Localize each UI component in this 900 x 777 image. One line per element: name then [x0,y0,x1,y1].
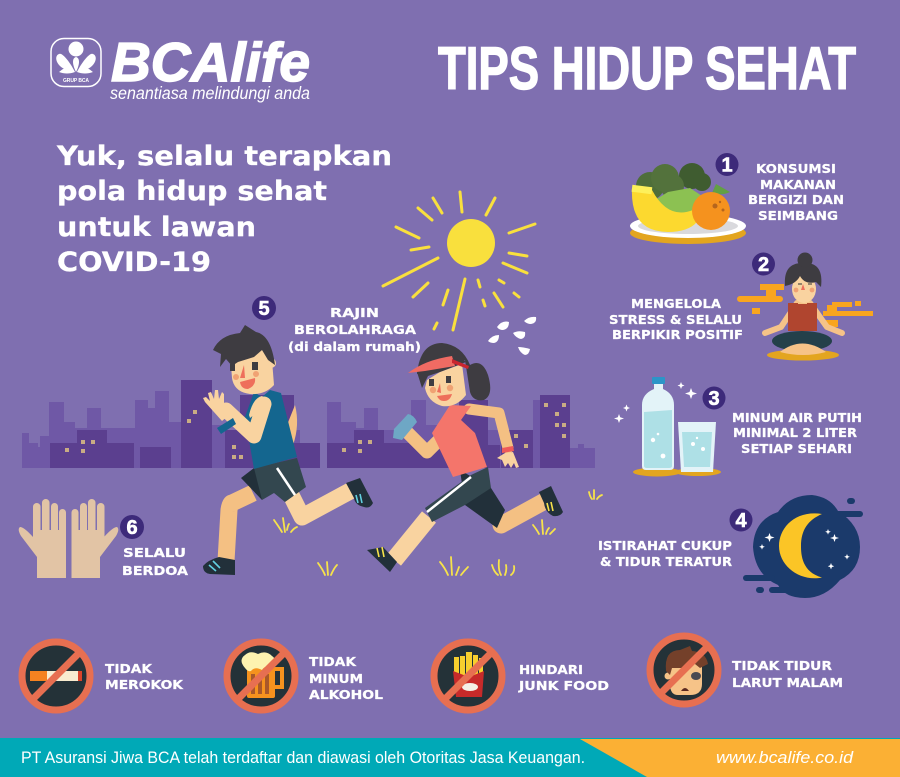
icon: moon and stars [743,495,863,598]
label [598,538,732,569]
label: MAKANAN [760,177,836,192]
city skyline [22,380,595,468]
tip 2: stress [609,252,873,360]
label: KONSUMSI [756,161,836,176]
icon: bottle and glass [633,377,721,476]
badge 3: 3 [708,388,720,410]
icon: meditating woman [737,252,873,360]
badge 2 [752,252,775,276]
label: ISTIRAHAT CUKUP [598,538,732,553]
tip 4: sleep [598,495,863,598]
badge 1 [716,153,738,176]
icon: tired face crossed out [650,636,718,704]
grass tufts [274,490,602,575]
label: MEROKOK [105,677,184,692]
label: rajin berolahraga: BEROLAHRAGA [294,322,416,337]
label: rajin berolahraga: (di dalam rumah) [288,339,421,354]
label: SEIMBANG [758,208,838,223]
label: BERGIZI DAN [748,192,844,207]
tip 1: food [630,153,844,244]
label: ALKOHOL [309,687,383,702]
icon: plate of food [630,163,746,244]
label: & TIDUR TERATUR [600,554,732,569]
label: rajin berolahraga [288,305,421,354]
heading text block: untuk lawan [57,212,256,243]
label: MINUM [309,671,363,686]
label [732,658,843,690]
website: www.bcalife.co.id [716,748,854,767]
wordmark: BCAlife [111,31,310,93]
badge 2: 2 [758,254,769,276]
label [518,662,609,693]
badge 1: 1 [721,154,733,176]
logo: BCA life [51,31,310,103]
badge 4 [730,508,752,532]
icon: BCA emblem: GRUP BCA [63,78,89,84]
label [748,161,844,223]
label: TIDAK [309,654,357,669]
tip 3: water [614,377,862,476]
label: MINUM AIR PUTIH [732,410,862,425]
prohibition: no alcohol [227,642,383,710]
footer bar [0,738,900,777]
label: selalu berdoa: SELALU [123,545,186,560]
prohibition: no staying up late [650,636,843,704]
badge 6: 6 [126,517,138,539]
label: selalu berdoa: BERDOA [122,563,188,578]
badge 4: 4 [735,510,747,532]
label: JUNK FOOD [518,678,609,693]
icon: sparkles [614,382,697,423]
tagline: senantiasa melindungi anda [110,83,310,103]
label: selalu berdoa [122,545,188,578]
disclaimer text: PT Asuransi Jiwa BCA telah terdaftar dan diawasi oleh Otoritas Jasa Keuangan. [21,748,585,767]
character: woman running [367,343,563,572]
icon: praying hands [19,499,118,578]
label: MENGELOLA [631,296,721,311]
prohibition: no smoking [22,642,184,710]
prohibition: no junk food [434,642,609,710]
character: man running [203,325,373,575]
icon: BCA emblem [51,38,101,86]
icon: sweat drops [488,317,536,355]
label [309,654,383,702]
badge 5: 5 [258,298,270,320]
icon: fries crossed out [434,642,502,710]
label: HINDARI [519,662,583,677]
icon: beer crossed out [227,642,295,710]
badge 5 [252,296,276,320]
label [609,296,743,342]
heading text block [56,141,392,278]
badge 6 [120,515,144,539]
label: TIDAK [105,661,153,676]
icon: sun with rays [383,192,535,330]
label: TIDAK TIDUR [732,658,832,673]
label: LARUT MALAM [732,675,843,690]
label: STRESS & SELALU [609,312,742,327]
label: SETIAP SEHARI [741,441,852,456]
label [732,410,862,456]
label: MINIMAL 2 LITER [733,425,857,440]
label [105,661,184,692]
icon: cigarette crossed out [22,642,90,710]
badge 3 [702,386,726,410]
heading text block: COVID-19 [57,247,211,278]
label: BERPIKIR POSITIF [612,327,743,342]
heading text block: Yuk, selalu terapkan [56,141,392,172]
label: rajin berolahraga: RAJIN [330,305,379,320]
heading text block: pola hidup sehat [57,176,327,207]
